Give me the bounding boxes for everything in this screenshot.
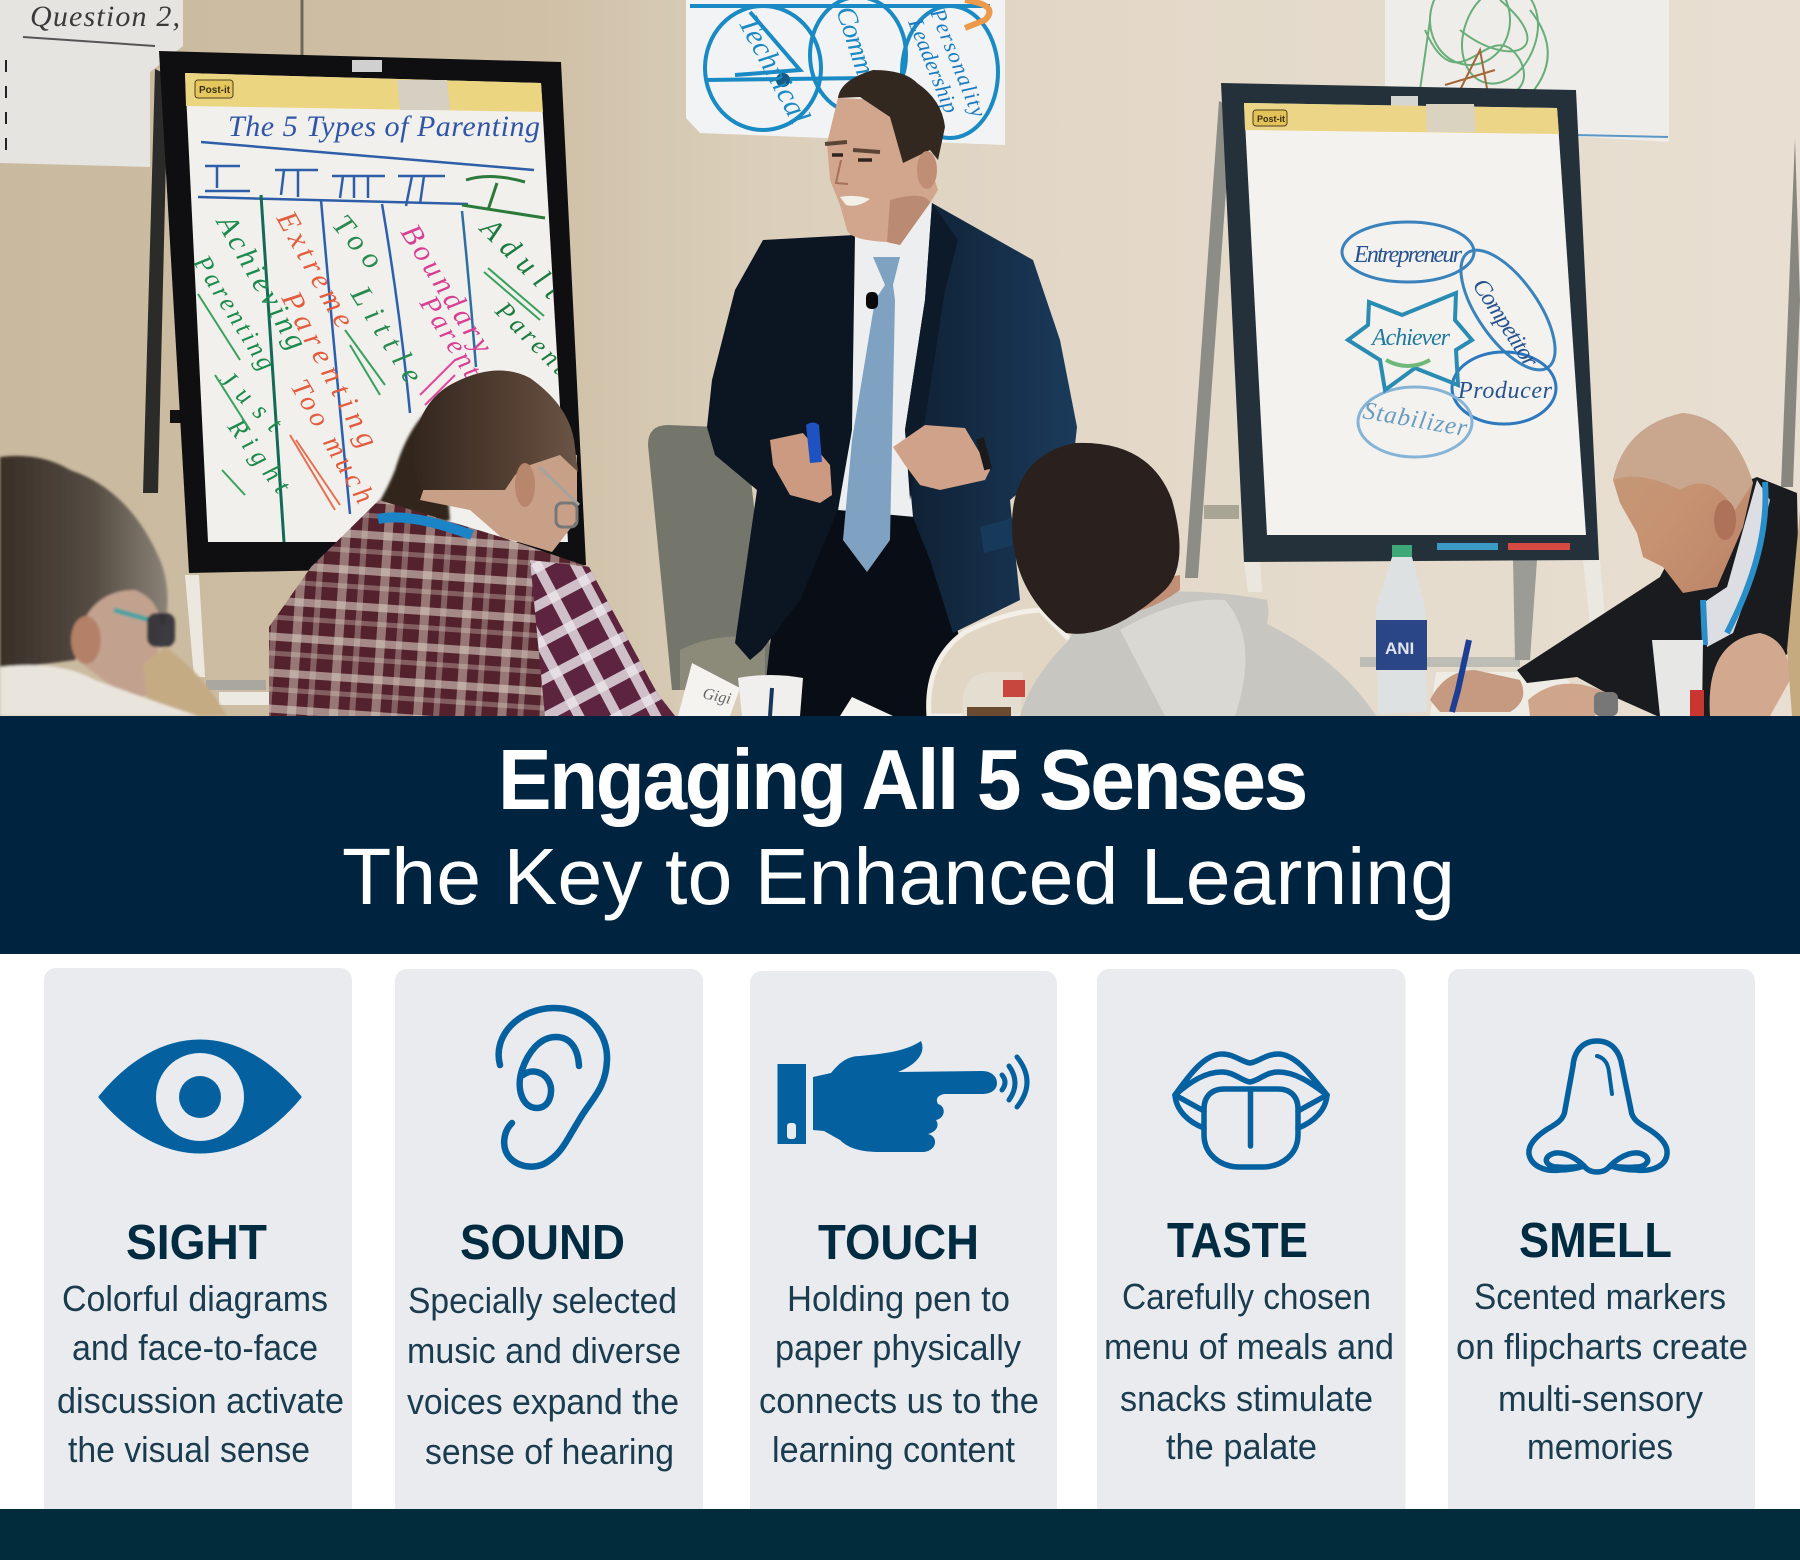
text: smell description: on flipcharts create bbox=[1456, 1326, 1748, 1367]
text: touch description bbox=[759, 1278, 1039, 1470]
flipchart: five types of parenting: Parenting bbox=[274, 285, 385, 453]
flipchart: achiever diagram bbox=[1185, 83, 1800, 667]
flipchart: five types of parenting: Achieving bbox=[209, 207, 314, 355]
flipchart: five types of parenting: Parenting bbox=[187, 249, 281, 375]
icon: pointing hand bbox=[778, 1041, 1027, 1152]
title banner bbox=[0, 716, 1800, 954]
text: taste description bbox=[1104, 1276, 1394, 1467]
flipchart: achiever diagram: Stabilizer bbox=[1361, 397, 1469, 442]
text: sound description: voices expand the bbox=[407, 1381, 679, 1422]
text: taste description: the palate bbox=[1166, 1426, 1317, 1467]
seated participant: grey hoodie bbox=[929, 443, 1376, 716]
heading: smell: SMELL bbox=[1519, 1214, 1672, 1268]
flipchart: five types of parenting bbox=[143, 51, 586, 705]
icon: mouth and tongue bbox=[1175, 1054, 1327, 1167]
text: smell description: memories bbox=[1527, 1426, 1673, 1467]
footer band bbox=[0, 1509, 1800, 1560]
panel: smell bbox=[1448, 969, 1755, 1529]
text: smell description: multi-sensory bbox=[1498, 1378, 1703, 1419]
flipchart: five types of parenting: Adult bbox=[473, 210, 569, 306]
text: touch description: paper physically bbox=[775, 1327, 1021, 1368]
flipchart: five types of parenting: Parent bbox=[413, 289, 488, 384]
title: subheading: The Key to Enhanced Learning bbox=[342, 832, 1455, 921]
heading: taste: TASTE bbox=[1167, 1214, 1308, 1268]
text: touch description: Holding pen to bbox=[787, 1278, 1010, 1319]
flipchart: five types of parenting: Right bbox=[222, 412, 297, 499]
text: taste description: Carefully chosen bbox=[1122, 1276, 1371, 1317]
flipchart: achiever diagram: Post-it bbox=[1257, 114, 1285, 124]
text: taste description: menu of meals and bbox=[1104, 1326, 1394, 1367]
wall paper: top centre poster bbox=[686, 0, 1005, 145]
water bottle bbox=[1376, 545, 1427, 714]
text: sight description: Colorful diagrams bbox=[62, 1278, 328, 1319]
flipchart: five types of parenting: Boundary bbox=[394, 218, 500, 360]
text: smell description bbox=[1456, 1276, 1748, 1467]
flipchart: five types of parenting: Just bbox=[214, 364, 288, 438]
table items: name card and cup: Gigi bbox=[701, 685, 733, 708]
water bottle: ANI bbox=[1385, 639, 1414, 658]
flipchart: achiever diagram: Competitor bbox=[1467, 274, 1544, 373]
icon: ear bbox=[499, 1008, 607, 1167]
wall paper: top right sheet bbox=[1385, 0, 1669, 142]
wall paper: top centre poster: Comm bbox=[829, 3, 880, 79]
flipchart: achiever diagram: Entrepreneur bbox=[1353, 242, 1463, 268]
presenter bbox=[707, 70, 1077, 716]
panel: sight bbox=[44, 968, 352, 1528]
panel: touch bbox=[750, 971, 1057, 1531]
seated participant: right with lanyard bbox=[1430, 413, 1800, 716]
text: sight description: and face-to-face bbox=[72, 1327, 318, 1368]
text: sound description: Specially selected bbox=[408, 1280, 677, 1321]
flipchart: five types of parenting: Extreme bbox=[269, 205, 361, 333]
heading: sound: SOUND bbox=[460, 1216, 625, 1270]
title: main heading: Engaging All 5 Senses bbox=[498, 732, 1306, 828]
flipchart: five types of parenting: Post-it bbox=[199, 85, 231, 96]
flipchart: five types of parenting: Little bbox=[344, 279, 429, 389]
wall paper: top centre poster: Leadership bbox=[903, 14, 964, 117]
wall paper: top centre poster: Personality bbox=[925, 4, 992, 121]
flipchart: five types of parenting: Parent bbox=[489, 295, 574, 380]
wall paper: top left sheet bbox=[0, 0, 183, 167]
wall paper: top left sheet: Question 2, bbox=[30, 0, 180, 33]
flipchart: five types of parenting: Too bbox=[326, 208, 389, 275]
wall paper: top centre poster: Technical bbox=[732, 10, 816, 129]
text: touch description: connects us to the bbox=[759, 1380, 1039, 1421]
text: smell description: Scented markers bbox=[1474, 1276, 1726, 1317]
heading: touch: TOUCH bbox=[818, 1216, 979, 1270]
text: sound description bbox=[407, 1280, 681, 1472]
text: sight description: the visual sense bbox=[68, 1429, 310, 1470]
text: touch description: learning content bbox=[772, 1429, 1015, 1470]
panel: taste bbox=[1097, 969, 1406, 1529]
chair behind presenter bbox=[648, 425, 775, 690]
flipchart: five types of parenting: The 5 Types of Parenting bbox=[228, 110, 540, 143]
flipchart: five types of parenting: Too much bbox=[284, 374, 380, 509]
icon: nose bbox=[1529, 1041, 1667, 1172]
text: sound description: music and diverse bbox=[407, 1330, 681, 1371]
flipchart: achiever diagram: Producer bbox=[1457, 378, 1553, 404]
flipchart: achiever diagram: Achiever bbox=[1370, 325, 1451, 351]
text: taste description: snacks stimulate bbox=[1120, 1378, 1373, 1419]
text: sound description: sense of hearing bbox=[425, 1431, 674, 1472]
table items: name card and cup bbox=[678, 663, 893, 716]
text: sight description bbox=[57, 1278, 344, 1470]
panel: sound bbox=[395, 969, 703, 1529]
seated participant: plaid shirt bbox=[269, 370, 675, 716]
heading: sight: SIGHT bbox=[126, 1216, 267, 1270]
photo: presenter at flipcharts bbox=[0, 0, 1800, 716]
icon: eye bbox=[100, 1041, 300, 1152]
text: sight description: discussion activate bbox=[57, 1380, 344, 1421]
seated participant: foreground left bbox=[0, 456, 227, 716]
